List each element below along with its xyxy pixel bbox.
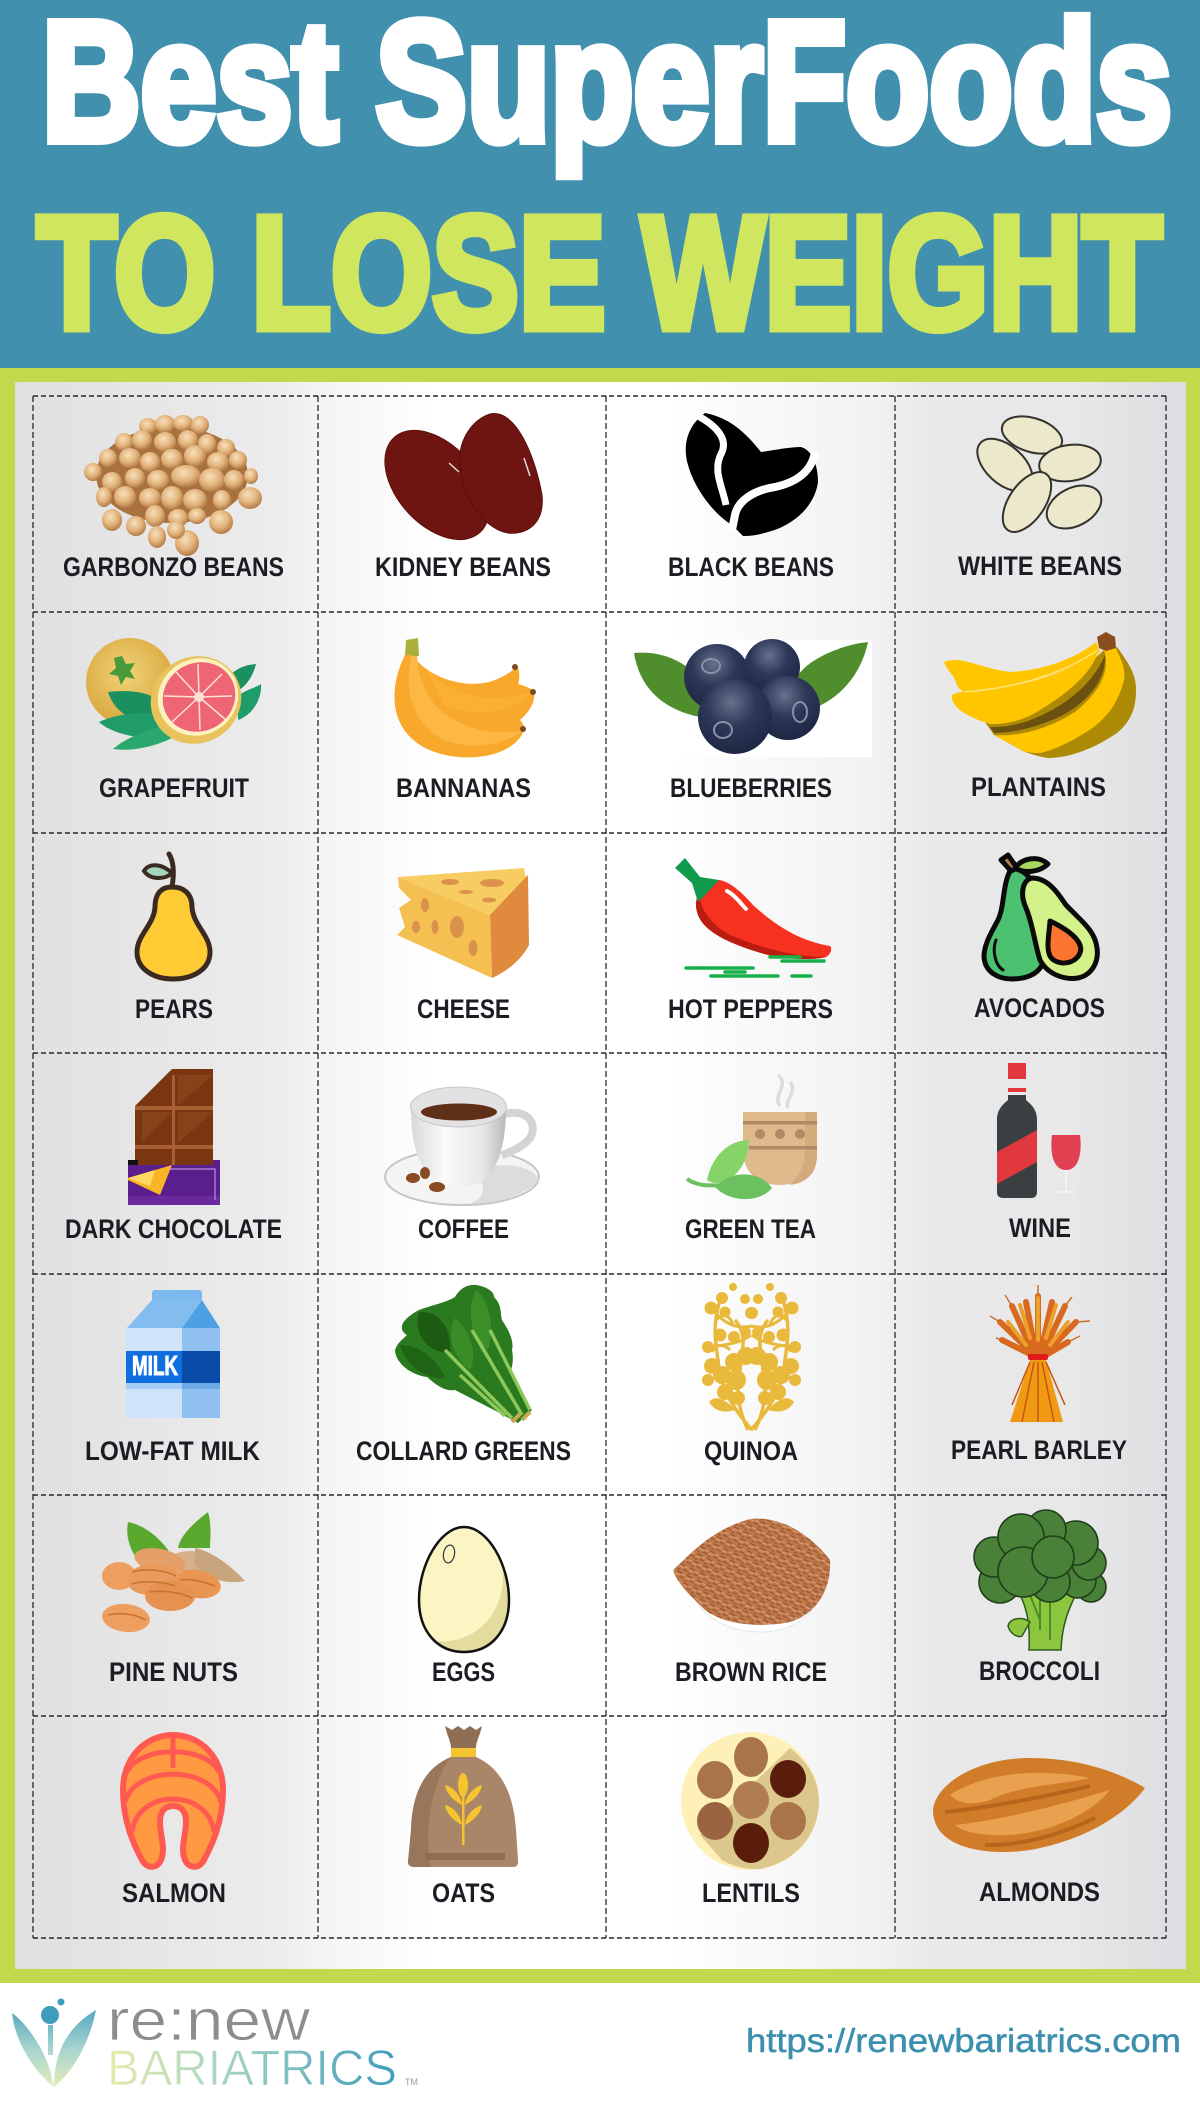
icon: sack of oats <box>408 1726 518 1867</box>
cell: pine nuts <box>101 1512 245 1687</box>
label: ALMONDS <box>979 1877 1100 1907</box>
label: PEARL BARLEY <box>951 1435 1127 1465</box>
label: BROCCOLI <box>979 1656 1100 1686</box>
icon: nuts with leaves <box>101 1512 245 1634</box>
cell: dark chocolate <box>65 1069 282 1244</box>
label: BLACK BEANS <box>668 552 834 582</box>
label: KIDNEY BEANS <box>375 552 551 582</box>
cell: avocados <box>974 855 1105 1023</box>
label: CHEESE <box>417 994 510 1024</box>
icon: pear <box>137 854 210 979</box>
icon: avocado <box>984 855 1097 979</box>
icon: grapefruit <box>86 638 261 760</box>
label: GREEN TEA <box>685 1214 816 1244</box>
label: LENTILS <box>702 1878 800 1908</box>
icon: almond <box>933 1758 1145 1852</box>
label: QUINOA <box>704 1436 798 1466</box>
icon: chickpeas pile <box>84 415 262 556</box>
cell: plantains <box>944 632 1136 802</box>
cell: salmon <box>122 1735 226 1908</box>
icon: red chili pepper <box>675 858 831 976</box>
label: LOW-FAT MILK <box>85 1436 260 1466</box>
cell: lentils <box>681 1732 819 1908</box>
icon: quinoa plant <box>702 1283 801 1430</box>
label: EGGS <box>432 1657 495 1687</box>
icon: logo figure <box>12 1998 96 2087</box>
icon: milk carton: MILK <box>132 1350 178 1381</box>
wordmark: Bariatrics: BARIATRICS <box>107 2040 397 2096</box>
label: COLLARD GREENS <box>356 1436 571 1466</box>
logo: re:new Bariatrics <box>12 1988 418 2096</box>
cell: eggs <box>419 1527 509 1687</box>
trademark: TM <box>405 2077 418 2087</box>
cell: green tea <box>685 1075 817 1244</box>
label: PINE NUTS <box>109 1657 238 1687</box>
label: SALMON <box>122 1878 226 1908</box>
icon: cheese wedge <box>397 868 529 978</box>
label: GRAPEFRUIT <box>99 773 249 803</box>
icon: kidney beans <box>364 411 542 559</box>
cell: wine <box>997 1063 1081 1243</box>
cell: blueberries <box>634 639 872 803</box>
cell: collard greens <box>356 1285 571 1466</box>
icon: collard greens bunch <box>395 1285 532 1423</box>
cell: black beans <box>668 413 834 582</box>
header banner <box>0 0 1200 368</box>
icon: chocolate bar <box>128 1069 220 1205</box>
label: BANNANAS <box>396 773 531 803</box>
label: DARK CHOCOLATE <box>65 1214 282 1244</box>
cell: bananas <box>394 638 536 803</box>
label: WINE <box>1009 1213 1071 1243</box>
cell: pears <box>135 854 213 1024</box>
label: PLANTAINS <box>971 772 1106 802</box>
cell: coffee <box>385 1087 540 1244</box>
panel: food grid frame <box>0 368 1200 1983</box>
website url: https://renewbariatrics.com <box>746 2022 1181 2059</box>
icon: bowl of brown rice <box>673 1519 830 1632</box>
icon: milk carton <box>126 1290 220 1418</box>
label: HOT PEPPERS <box>668 994 833 1024</box>
icon: broccoli <box>974 1510 1106 1650</box>
cell: brown rice <box>673 1519 830 1687</box>
cell: broccoli <box>974 1510 1106 1686</box>
icon: egg <box>419 1527 509 1652</box>
wordmark: re:new: re:new <box>107 1988 311 2053</box>
cell: white beans <box>958 410 1122 581</box>
cell: quinoa <box>702 1283 801 1466</box>
icon: coffee cup on saucer <box>385 1087 540 1205</box>
label: COFFEE <box>418 1214 509 1244</box>
label: WHITE BEANS <box>958 551 1122 581</box>
cell: almonds <box>933 1758 1145 1907</box>
icon: white beans <box>968 410 1108 540</box>
icon: banana bunch <box>394 638 536 757</box>
icon: wine bottle and glass <box>997 1063 1081 1198</box>
label: BROWN RICE <box>675 1657 827 1687</box>
icon: tea cup with leaves <box>687 1075 817 1199</box>
cell: grapefruit <box>86 638 261 803</box>
cell: low-fat milk <box>85 1290 260 1466</box>
label: PEARS <box>135 994 213 1024</box>
icon: black coffee-like beans <box>686 413 818 536</box>
cell: garbonzo beans <box>63 415 284 582</box>
cell: oats <box>408 1726 518 1908</box>
label: GARBONZO BEANS <box>63 552 284 582</box>
cell: hot peppers <box>668 858 833 1024</box>
cell: kidney beans <box>364 411 551 582</box>
cell: cheese <box>397 868 529 1024</box>
icon: salmon steak <box>123 1735 223 1867</box>
cell: pearl barley <box>951 1285 1127 1465</box>
icon: plantains <box>944 632 1136 758</box>
label: OATS <box>432 1878 495 1908</box>
icon: blueberries with leaves <box>634 639 872 757</box>
icon: barley sheaf <box>990 1285 1090 1422</box>
icon: plate of lentils <box>681 1732 819 1870</box>
label: AVOCADOS <box>974 993 1105 1023</box>
label: BLUEBERRIES <box>670 773 832 803</box>
